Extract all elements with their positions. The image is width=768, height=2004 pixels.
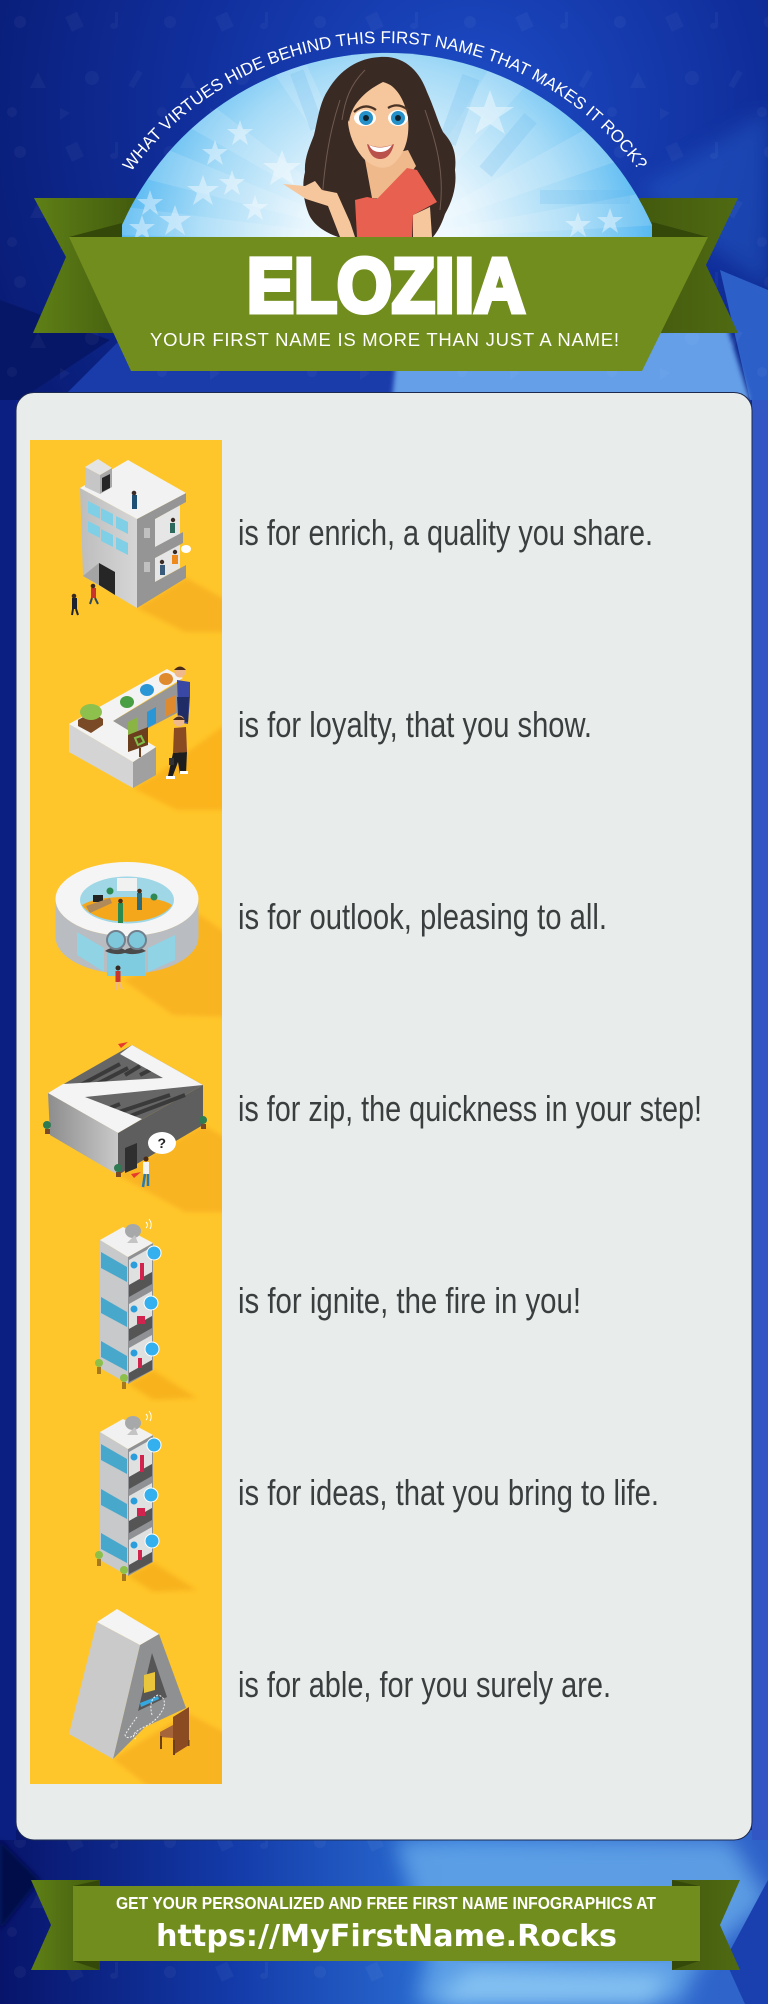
- row I: [95, 1219, 581, 1400]
- man brown: [173, 727, 187, 753]
- row A: [69, 1609, 611, 1790]
- people: [91, 588, 96, 598]
- row Z: [43, 1042, 702, 1212]
- header: sunburst dome with presenter: [100, 50, 670, 240]
- footer ribbon: [31, 1880, 740, 1970]
- face: [348, 82, 408, 168]
- url: https://MyFirstName.Rocks: [156, 1919, 617, 1954]
- shirt: [355, 168, 437, 237]
- illustration: L recycling station: [69, 666, 226, 810]
- mouth: [367, 144, 394, 159]
- illustration: Z maze block: [43, 1042, 226, 1212]
- dome background: [100, 50, 670, 240]
- illustration: O optician ring: [56, 862, 226, 1017]
- main panel: [16, 392, 752, 1840]
- illustration: Z maze block: ?: [158, 1135, 166, 1151]
- text: is for outlook, pleasing to all.: [238, 896, 607, 937]
- yellow illustration column: [30, 440, 222, 1784]
- call to action: GET YOUR PERSONALIZED AND FREE FIRST NAME INFOGRAPHICS AT: [116, 1893, 656, 1913]
- hair: [303, 57, 456, 237]
- neck: [365, 150, 416, 200]
- curved tagline: WHAT VIRTUES HIDE BEHIND THIS FIRST NAME THAT MAKES IT ROCK?: [122, 31, 647, 170]
- text: is for able, for you surely are.: [238, 1664, 611, 1705]
- illustration: I tower: [95, 1219, 197, 1400]
- ribbon front: [73, 1886, 700, 1961]
- illustration: I tower repeat: [95, 1411, 197, 1592]
- illustrated woman: [283, 57, 456, 237]
- header ribbon: [69, 222, 708, 371]
- name: ELOZIIA: [247, 243, 525, 329]
- text: is for ideas, that you bring to life.: [238, 1472, 659, 1513]
- ribbon folds: [69, 223, 122, 237]
- illustration: E building: [72, 459, 226, 632]
- man blue: [177, 680, 190, 724]
- text: is for loyalty, that you show.: [238, 704, 592, 745]
- ribbon front: [69, 237, 708, 371]
- ribbon tails: [31, 1880, 100, 1970]
- illustration: A block: [69, 1609, 226, 1790]
- text: is for ignite, the fire in you!: [238, 1280, 581, 1321]
- row O: [56, 862, 607, 1017]
- eyes: [354, 110, 376, 126]
- subtitle: YOUR FIRST NAME IS MORE THAN JUST A NAME!: [150, 329, 619, 350]
- ribbon back tails: [33, 198, 738, 333]
- row E: [72, 459, 653, 632]
- speech bubble: [148, 1132, 176, 1154]
- arm and hand: [283, 181, 355, 237]
- text: is for enrich, a quality you share.: [238, 512, 653, 553]
- row L: [69, 666, 592, 810]
- row I second: [95, 1411, 659, 1592]
- hair fringe: [346, 72, 409, 122]
